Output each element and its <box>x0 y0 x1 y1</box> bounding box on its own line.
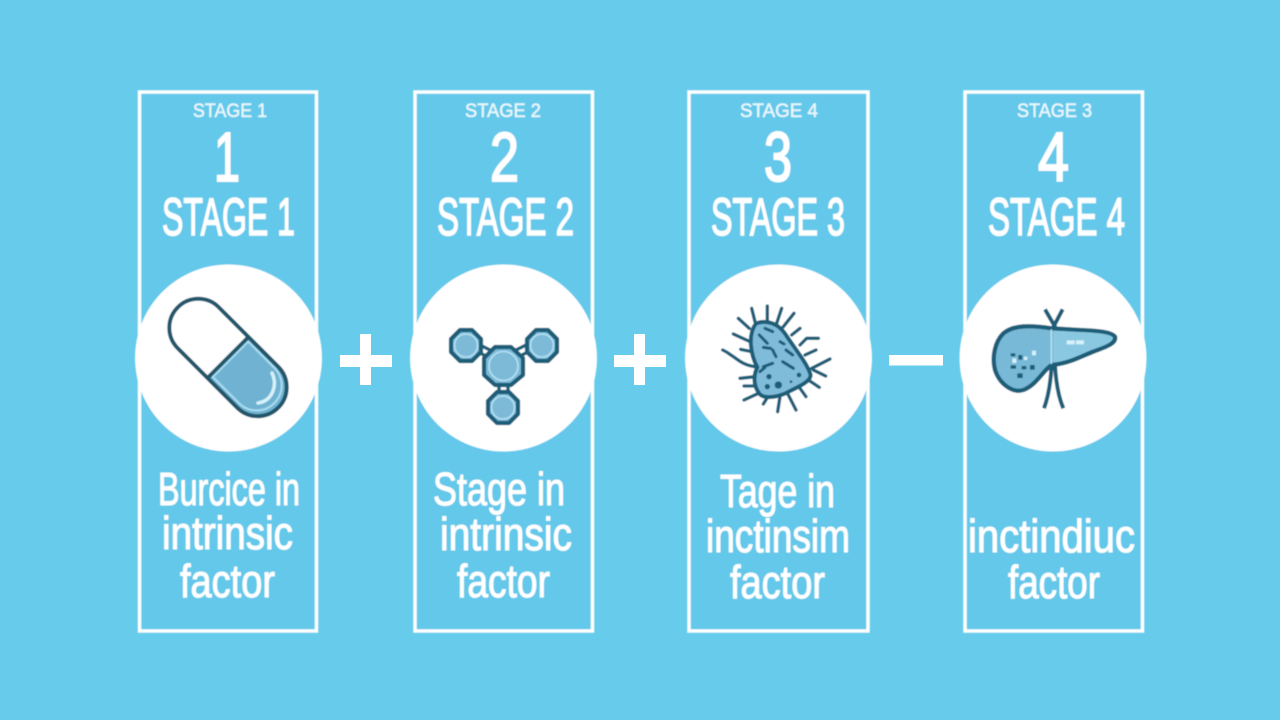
description: stage 1: factor <box>180 555 275 607</box>
numeral 1: 1 <box>214 118 240 196</box>
description: stage 2: factor <box>457 555 550 607</box>
heading: stage 3: STAGE 3 <box>711 188 845 247</box>
description: stage 1 <box>158 463 300 607</box>
operator: plus 1 <box>340 334 392 385</box>
operator: minus <box>889 355 943 366</box>
small label: stage 3: STAGE 4 <box>740 101 818 122</box>
small label: stage 4: STAGE 3 <box>1017 101 1092 122</box>
description: stage 3: Tage in <box>720 465 835 517</box>
description: stage 4 <box>968 510 1135 608</box>
numeral 4: 4 <box>1038 118 1069 196</box>
small label: stage 1: STAGE 1 <box>193 101 267 122</box>
icon circle: liver <box>960 264 1146 452</box>
numeral 2: 2 <box>490 118 519 196</box>
description: stage 2 <box>433 463 572 607</box>
icon circle: capsule <box>135 264 322 452</box>
heading: stage 2: STAGE 2 <box>437 188 574 247</box>
panel: stage 1 <box>135 92 322 631</box>
description: stage 2: intrinsic <box>440 508 572 560</box>
description: stage 1: intrinsic <box>162 507 293 559</box>
description: stage 3 <box>706 465 850 608</box>
numeral 3: 3 <box>764 118 792 196</box>
panel: stage 2 <box>410 92 597 631</box>
panel: stage 4 <box>960 92 1146 631</box>
heading: stage 1: STAGE 1 <box>162 188 295 247</box>
description: stage 2: Stage in <box>433 463 565 515</box>
icon circle: molecule <box>410 264 597 452</box>
operator: plus 2 <box>614 334 666 385</box>
description: stage 1: Burcice in <box>158 463 300 515</box>
panel: stage 3 <box>685 92 872 631</box>
description: stage 3: factor <box>730 556 825 608</box>
small label: stage 2: STAGE 2 <box>465 101 541 122</box>
icon circle: bacterium <box>685 264 872 452</box>
heading: stage 4: STAGE 4 <box>988 188 1125 247</box>
description: stage 4: factor <box>1008 556 1100 608</box>
description: stage 4: inctindiuc <box>968 510 1135 562</box>
description: stage 3: inctinsim <box>706 510 850 562</box>
